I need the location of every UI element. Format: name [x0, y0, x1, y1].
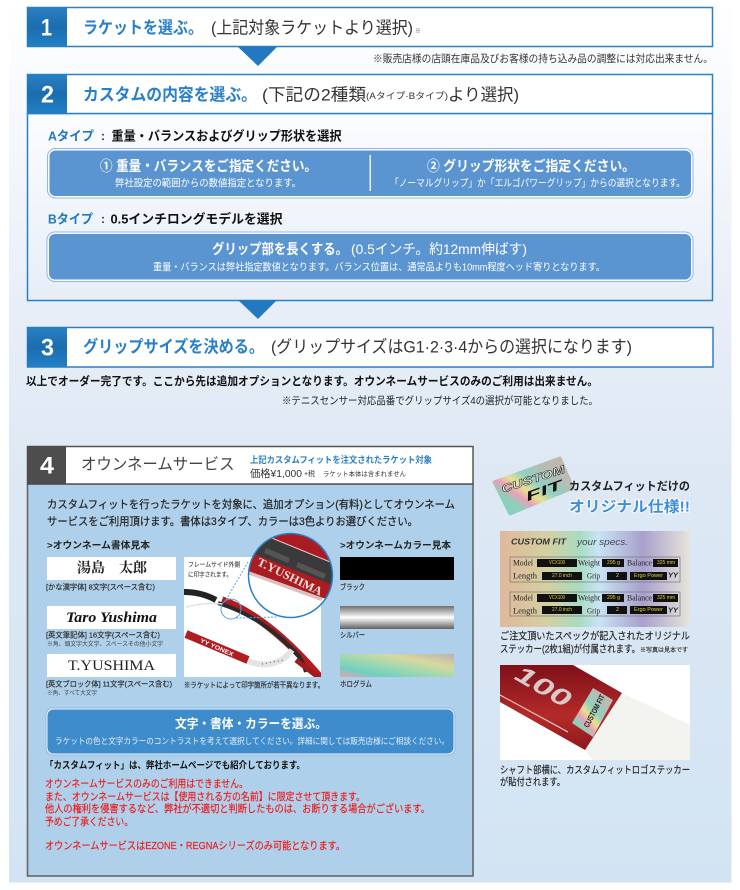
spec table 2: 295 g [607, 595, 620, 601]
holographic logo card [494, 458, 573, 514]
footnote mark: ※ [415, 28, 421, 35]
option 2 [390, 158, 685, 190]
callout lines [226, 562, 277, 618]
spec table 2: 325 mm [657, 595, 675, 601]
type B option box: グリップ部を長くする。 [212, 241, 348, 257]
script sample [46, 606, 176, 648]
type B option box: (0.5インチ。約12mm伸ばす) [351, 241, 527, 257]
script sample: Taro Yushima [66, 610, 158, 626]
magnifier lens [249, 534, 332, 603]
spec table 2: Model [513, 594, 534, 602]
type A options box [48, 148, 693, 198]
spec table 1: 2 [616, 573, 619, 579]
step 2 detail: より選択) [448, 86, 519, 104]
order complete note: 以上でオーダー完了です。ここから先は追加オプションとなります。オウンネームサービスのみのご利用は出来ません。 [26, 374, 598, 388]
choose text box: 文字・書体・カラーを選ぶ。 [175, 716, 327, 731]
type A heading: Aタイプ [48, 128, 94, 144]
block sample: ※角、すべて大文字 [47, 689, 97, 697]
step 4 panel [27, 446, 473, 876]
step 3 bar [27, 327, 713, 367]
spec table 2: YY [668, 608, 679, 614]
spec table 1: Model [513, 558, 534, 568]
spec table 1: Grip [587, 572, 600, 580]
block sample: [英文ブロック体] 11文字(スペース含む) [46, 678, 172, 688]
spec table 1: Weight [578, 558, 601, 568]
choose text box [46, 708, 455, 755]
racket brand mark: YY YONEX [199, 638, 234, 658]
intro text: サービスをご利用頂けます。書体は3タイプ、カラーは3色よりお選びください。 [47, 514, 418, 528]
step 2 detail: (Aタイプ·Bタイプ) [366, 91, 448, 101]
red notices: 他人の権利を侵害するなど、弊社が不適切と判断したものは、お断りする場合がございます。 [45, 802, 430, 815]
step 2 number [27, 74, 67, 114]
red notices: また、オウンネームサービスは【使用される方の名前】に限定させて頂きます。 [45, 790, 365, 803]
step 2 detail [262, 86, 519, 104]
spec table 1: VCX100 [549, 560, 565, 566]
hologram swatch [340, 654, 454, 688]
side heading: カスタムフィットだけの [569, 480, 690, 493]
homepage note: 「カスタムフィット」は、弊社ホームページでも紹介しております。 [45, 760, 305, 772]
step 1 number: 1 [41, 14, 52, 42]
step 1 detail: (上記対象ラケットより選択) [211, 18, 413, 38]
print location caption [188, 560, 240, 578]
logo sticker on shaft [572, 688, 613, 737]
spec table 1: 27.0 inch [552, 573, 572, 579]
step 4 number: 4 [40, 452, 55, 480]
silver swatch: シルバー [340, 630, 365, 640]
step 1 number [27, 7, 67, 47]
price [250, 467, 406, 480]
arrow: step 1 to 2 [238, 47, 277, 66]
shaft caption: シャフト部横に、カスタムフィットロゴステッカー [500, 764, 690, 776]
step 3 number: 3 [41, 334, 54, 362]
spec table 1: Ergo Power [634, 573, 663, 579]
racket photo with magnified name print [184, 530, 340, 690]
kanji sample: [かな漢字体] 8文字(スペース含む) [46, 582, 155, 592]
step 2 panel [27, 74, 712, 300]
step 4 number [27, 446, 66, 484]
black swatch [340, 557, 454, 592]
sticker caption: ステッカー(2枚1組)が付属されます。 [500, 642, 640, 656]
spec table 2 [510, 592, 680, 616]
price: ラケット本体は含まれません [323, 469, 406, 478]
custom fit side column [494, 458, 690, 788]
shaft photo: 100 [510, 660, 577, 714]
shaft photo [500, 660, 690, 760]
print location caption: フレームサイド外側 [188, 560, 240, 568]
choose text box: ラケットの色と文字カラーのコントラストを考えて選択してください。詳細に関しては販売店様にご相談ください。 [55, 736, 449, 746]
spec table 2: 27.0 inch [552, 607, 572, 613]
type B option box [47, 232, 693, 282]
kanji sample [46, 557, 176, 592]
spec table 1: YY [668, 572, 679, 580]
red notices: オウンネームサービスのみのご利用はできません。 [45, 777, 248, 790]
step 4 heading: オウンネームサービス [81, 456, 234, 474]
typeface heading: >オウンネーム書体見本 [47, 540, 151, 552]
spec table 2: Length [513, 606, 537, 616]
spec table 2: Weight [578, 594, 601, 602]
photo caption: ※ラケットによって印字箇所が若干異なります。 [184, 680, 324, 690]
block sample: T.YUSHIMA [68, 658, 155, 674]
option 1: 弊社設定の範囲からの数値指定となります。 [115, 176, 301, 190]
spec table 1: Balance [627, 558, 652, 568]
step 2 detail: (下記の2種類 [262, 86, 366, 104]
type B option box: 重量・バランスは弊社指定数値となります。バランス位置は、通常品よりも10mm程度ヘッド寄りとなります。 [153, 260, 605, 274]
type B heading: : [101, 212, 105, 226]
spec table 2: Ergo Power [634, 607, 663, 613]
type B heading: Bタイプ [48, 212, 93, 226]
spec table 1: 325 mm [657, 560, 675, 566]
tennis sensor note: ※テニスセンサー対応品番でグリップサイズ4の選択が可能となりました。 [282, 394, 598, 407]
script sample: [英文筆記体] 16文字(スペース含む) [46, 630, 160, 640]
typeface samples [46, 540, 176, 697]
spec table 2: 2 [616, 607, 619, 613]
hologram swatch: ホログラム [340, 678, 372, 688]
holographic logo card: FIT [523, 476, 566, 504]
arrow: step 2 to 3 [238, 300, 277, 319]
eligibility note: 上記カスタムフィットを注文されたラケット対象 [250, 454, 432, 465]
magnifier lens: T.YUSHIMA [255, 555, 325, 599]
intro text [47, 497, 455, 528]
step 2 heading: カスタムの内容を選ぶ。 [83, 84, 257, 104]
price: 価格¥1,000 [250, 467, 302, 480]
silver swatch [340, 606, 454, 640]
option 2: ② グリップ形状をご指定ください。 [427, 158, 635, 174]
black swatch: ブラック [340, 582, 365, 592]
racket frame [184, 592, 324, 682]
type A heading: 重量・バランスおよびグリップ形状を選択 [112, 128, 342, 144]
step 3 detail: (グリップサイズはG1·2·3·4からの選択になります) [271, 338, 632, 356]
spec sticker photo [500, 531, 690, 627]
note on store stock: ※販売店様の店頭在庫品及びお客様の持ち込み品の調整には対応出来ません。 [373, 52, 713, 65]
logo sticker on shaft: CUSTOM FIT [582, 693, 607, 729]
script sample: ※角、頭文字大文字、スペースその他小文字 [47, 640, 163, 648]
option 1 [100, 158, 317, 190]
red notices: オウンネームサービスはEZONE・REGNAシリーズのみ可能となります。 [45, 839, 345, 852]
step 2 number: 2 [41, 82, 54, 108]
kanji sample: 湯島 太郎 [77, 560, 147, 576]
spec sticker photo: CUSTOM FIT [511, 538, 567, 546]
step 1 heading: ラケットを選ぶ。 [83, 18, 203, 38]
intro text: カスタムフィットを行ったラケットを対象に、追加オプション(有料)としてオウンネーム [47, 497, 455, 511]
red notices [45, 777, 430, 852]
step 3 number [27, 327, 67, 367]
step 1 bar [27, 7, 712, 47]
spec table 1: 295 g [607, 560, 620, 566]
spec sticker photo: your specs. [576, 537, 628, 547]
option 2: 「ノーマルグリップ」か「エルゴパワーグリップ」からの選択となります。 [390, 176, 685, 190]
price: +税 [304, 469, 315, 478]
shaft caption: が貼付されます。 [500, 776, 565, 788]
colour samples [340, 540, 454, 688]
type A heading: : [101, 129, 105, 143]
spec table 2: Balance [627, 594, 652, 602]
block sample [46, 654, 176, 697]
spec table 1 [510, 557, 680, 582]
spec table 2: VCX100 [549, 595, 565, 601]
shaft caption [500, 764, 690, 788]
print location caption: に印字されます。 [188, 570, 232, 578]
step 3 heading: グリップサイズを決める。 [83, 336, 264, 356]
spec table 1: Length [513, 572, 537, 580]
original spec heading: オリジナル仕様!! [569, 498, 690, 516]
red notices: 予めご了承ください。 [45, 815, 133, 828]
sticker caption: ※写真は見本です [640, 646, 688, 654]
type B heading: 0.5インチロングモデルを選択 [110, 212, 282, 226]
option 1: ① 重量・バランスをご指定ください。 [100, 158, 317, 174]
sticker caption [500, 630, 690, 656]
holographic logo card: CUSTOM [500, 464, 568, 496]
spec table 2: Grip [587, 606, 600, 616]
colour heading: >オウンネームカラー見本 [340, 540, 452, 552]
sticker caption: ご注文頂いたスペックが記入されたオリジナル [500, 630, 690, 642]
